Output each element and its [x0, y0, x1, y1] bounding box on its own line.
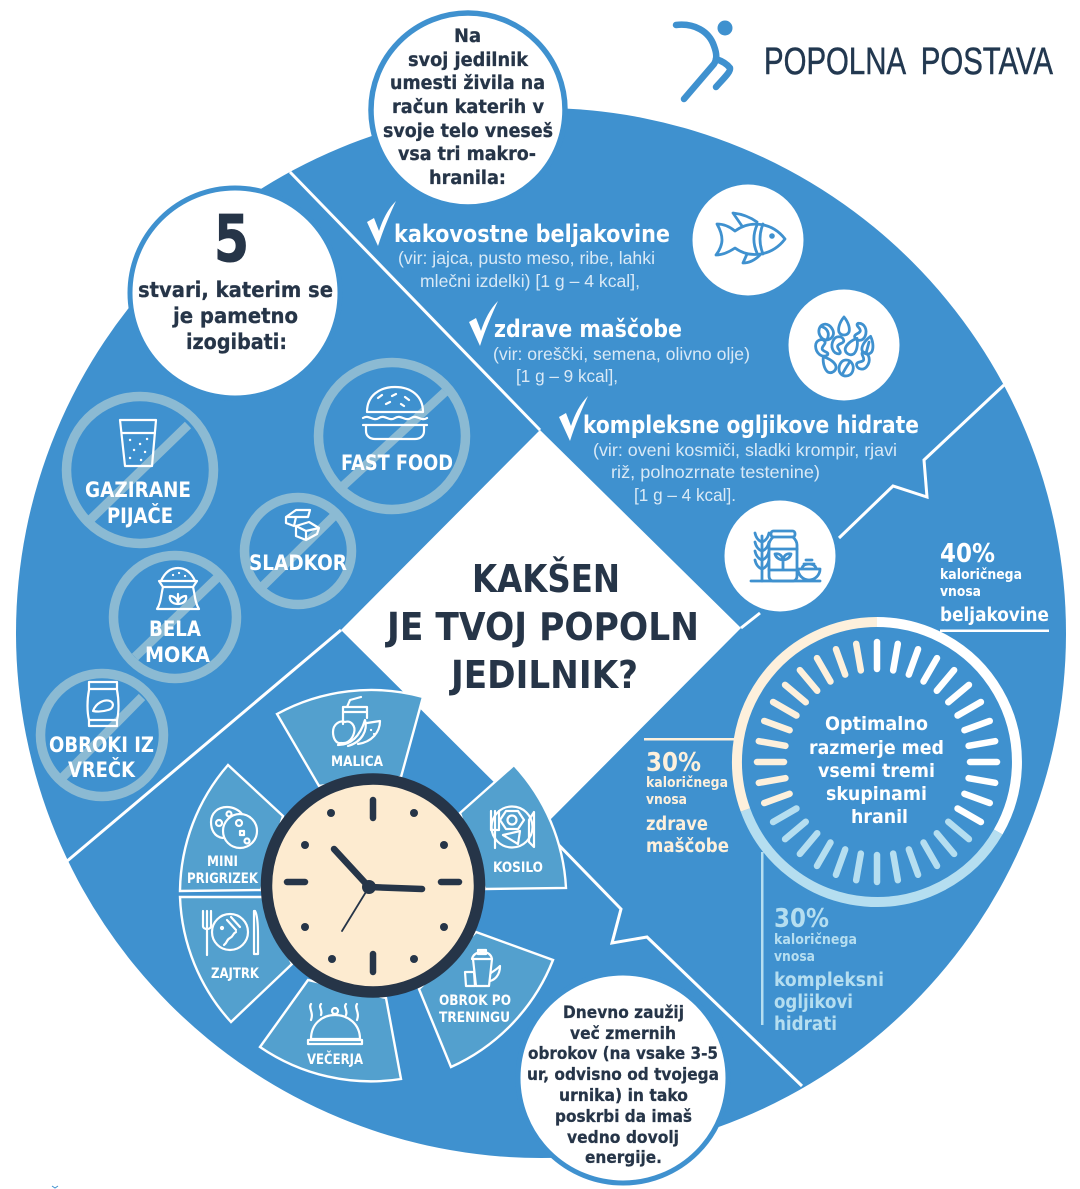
title: JEDILNIK? [448, 653, 638, 698]
tiny footer mark [52, 1186, 58, 1188]
panel: healthy fats text: (vir: oreščki, semena, olivno olje) [493, 344, 750, 364]
panel: večerja wedge: VEČERJA [307, 1050, 364, 1068]
panel: kosilo wedge: KOSILO [493, 860, 543, 876]
panel: proteins text: kakovostne beljakovine [394, 220, 670, 248]
ticks: fats [757, 644, 861, 803]
panel: sugar forbidden: SLADKOR [249, 551, 347, 576]
clock dots [301, 809, 448, 963]
bubble text: stvari, katerim se [138, 278, 333, 303]
stat: 30% fats [644, 738, 734, 857]
icon: breakfast plate [203, 911, 258, 955]
ring centre text: hranil [851, 806, 908, 828]
bubble text: svoje telo vneseš [383, 121, 553, 142]
section divider lines [66, 172, 1004, 1086]
stat: 30% fats: 30% [646, 748, 701, 778]
stat: 40% proteins: beljakovine [940, 605, 1049, 626]
bubble text: Dnevno zaužij [563, 1003, 684, 1022]
ring centre text: vsemi tremi [818, 760, 935, 782]
icon: serving cloche [308, 1004, 362, 1044]
clock ticks [287, 800, 459, 972]
stat: 30% carbs: hidrati [774, 1014, 837, 1035]
bubble text: Na [454, 26, 481, 47]
panel: macronutrients bubble [371, 13, 565, 207]
panel: complex carbs text: riž, polnozrnate testenine) [611, 462, 820, 482]
bubble text: več zmernih [570, 1024, 676, 1043]
panel: soft drinks forbidden: GAZIRANE [85, 478, 191, 503]
panel: daily meals bubble [518, 973, 728, 1183]
stat: 30% carbs: kaloričnega [774, 932, 857, 948]
panel: healthy fats text: zdrave maščobe [494, 315, 682, 343]
panel: things to avoid bubble [130, 188, 340, 398]
bubble text: hranila: [429, 168, 506, 189]
icon: sugar cubes [286, 510, 319, 540]
stat: 30% fats: kaloričnega [646, 775, 728, 791]
bubble text: umesti živila na [390, 73, 545, 94]
bubble text: račun katerih v [392, 97, 544, 118]
stat: 30% carbs: 30% [774, 904, 829, 934]
panel: sugar forbidden [244, 498, 352, 604]
icon: lunch plate [491, 806, 534, 848]
icon: fish [692, 184, 804, 296]
panel: malica wedge [277, 690, 423, 786]
bubble text [383, 26, 553, 189]
stat: 30% fats: vnosa [646, 792, 687, 808]
stat: 30% fats: zdrave [646, 814, 708, 835]
title [384, 555, 699, 698]
panel: complex carbs text: (vir: oveni kosmiči, sladki krompir, rjavi [593, 440, 897, 460]
panel: zajtrk wedge [180, 897, 292, 1022]
stat: 30% fats: maščobe [646, 836, 729, 857]
ring segment: carbs 30% [745, 810, 998, 902]
panel: proteins text: mlečni izdelki) [1 g – 4 kcal], [420, 271, 640, 291]
panel: white flour forbidden: BELA [149, 617, 201, 642]
panel: complex carbs text [559, 396, 919, 505]
ring centre text [809, 713, 944, 828]
bubble text [527, 1003, 719, 1167]
bubble text: vedno dovolj [567, 1128, 679, 1147]
panel: complex carbs text: kompleksne ogljikove hidrate [583, 411, 919, 439]
ring centre text: razmerje med [809, 737, 944, 759]
panel: soft drinks forbidden [66, 396, 214, 544]
panel: mini prigrizek wedge: MINI [207, 854, 238, 870]
panel: kosilo wedge [460, 765, 566, 889]
icon: burger [363, 387, 427, 439]
panel: obrok po treningu wedge [419, 932, 553, 1067]
title: KAKŠEN [472, 555, 620, 602]
ticks: carbs [773, 808, 969, 882]
panel: healthy fats text [469, 301, 750, 386]
panel: healthy fats text: [1 g – 9 kcal], [516, 366, 618, 386]
bubble text: izogibati: [186, 330, 287, 355]
bubble text: obrokov (na vsake 3-5 [528, 1044, 718, 1063]
stat: 30% carbs: kompleksni [774, 970, 884, 991]
stat: 40% proteins: kaloričnega [940, 567, 1022, 583]
ring segment: proteins 40% [877, 622, 1017, 832]
title: JE TVOJ POPOLN [384, 605, 699, 650]
clock hands [334, 849, 422, 931]
central white diamond [341, 430, 741, 829]
panel: proteins text: (vir: jajca, pusto meso, ribe, lahki [398, 248, 655, 268]
bubble text: poskrbi da imaš [555, 1107, 692, 1126]
ring centre text: Optimalno [825, 713, 928, 735]
bubble text: je pametno [172, 304, 298, 329]
bubble text: energije. [585, 1148, 662, 1167]
clock [266, 779, 480, 992]
icon: check [559, 396, 588, 441]
panel: packaged meals forbidden: OBROKI IZ [49, 733, 154, 758]
stat: 30% carbs: vnosa [774, 949, 815, 965]
panel: packaged meals forbidden: VREČK [68, 757, 136, 783]
icon: fruit and juice [333, 697, 380, 746]
stat: 40% proteins: vnosa [940, 584, 981, 600]
stat: 40% proteins: 40% [940, 539, 995, 569]
icon: cookies [211, 807, 257, 848]
panel: obrok po treningu wedge: OBROK PO [439, 993, 511, 1009]
panel: večerja wedge [260, 980, 401, 1081]
panel: mini prigrizek wedge: PRIGRIZEK [187, 871, 259, 887]
big number five: 5 [214, 203, 249, 277]
ticks: proteins [877, 642, 997, 822]
bubble text: vsa tri makro- [398, 144, 536, 165]
ring segment: fats 30% [737, 622, 877, 810]
stat: 30% carbs [761, 852, 884, 1035]
panel: obrok po treningu wedge: TRENINGU [439, 1010, 510, 1026]
icon: flour sack [157, 568, 199, 609]
panel: zajtrk wedge: ZAJTRK [211, 966, 260, 982]
ring centre text: skupinami [826, 783, 927, 805]
bubble text: ur, odvisno od tvojega [527, 1065, 719, 1084]
icon: shaker and glass [465, 950, 500, 986]
panel: white flour forbidden: MOKA [145, 643, 210, 668]
panel: packaged meals forbidden [40, 674, 164, 796]
panel: fast food forbidden [318, 362, 466, 510]
bubble text: urnika) in tako [559, 1086, 688, 1105]
panel: soft drinks forbidden: PIJAČE [107, 503, 173, 529]
logo: Popolna Postava [676, 20, 1053, 99]
icon: nuts and seeds [788, 290, 900, 400]
panel: malica wedge: MALICA [331, 754, 384, 770]
icon: check [367, 201, 396, 246]
icon: food bag [88, 682, 118, 726]
panel: proteins text [367, 201, 670, 291]
panel: complex carbs text: [1 g – 4 kcal]. [634, 485, 736, 505]
panel: mini prigrizek wedge [180, 765, 283, 891]
stat: 40% proteins [940, 539, 1049, 632]
panel: white flour forbidden [114, 556, 236, 678]
icon: running figure [676, 20, 732, 99]
chart: macronutrient ratio ring [737, 622, 1017, 902]
panel: fast food forbidden: FAST FOOD [341, 451, 453, 476]
icon: glass [120, 420, 156, 466]
bubble text [138, 278, 333, 355]
bubble text: svoj jedilnik [408, 50, 529, 71]
icon: check [469, 301, 498, 346]
icon: whole grains [724, 500, 836, 612]
stat: 30% carbs: ogljikovi [774, 992, 853, 1013]
